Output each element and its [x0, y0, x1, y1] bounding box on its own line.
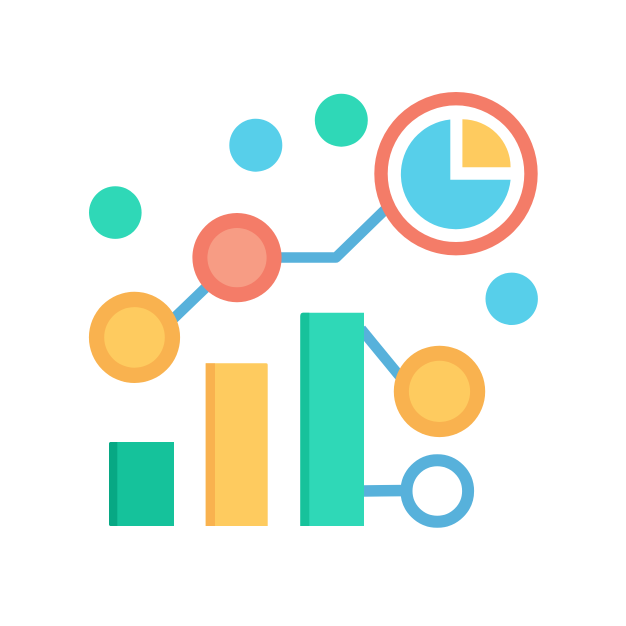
- decorative dot: green upper: [315, 94, 368, 147]
- decorative dot: blue upper: [229, 119, 282, 172]
- node: red: [192, 213, 282, 302]
- decorative dot: green left: [89, 186, 142, 239]
- node: yellow right: [394, 346, 485, 437]
- connector: tall bar to yellow node: [361, 329, 402, 379]
- bar: short green: [109, 442, 174, 526]
- node: yellow left: [89, 292, 180, 383]
- bar: tall green: [300, 313, 364, 526]
- pie large slice: [401, 120, 511, 229]
- bar: medium yellow: [206, 363, 268, 526]
- connector: tall bar to ring node: [362, 485, 410, 497]
- decorative dot: blue right: [486, 273, 538, 325]
- node: blue ring: [406, 460, 468, 522]
- pie small slice: [462, 119, 511, 167]
- line chart connector: [170, 203, 392, 322]
- magnifier ring with pie chart: [381, 99, 531, 249]
- ring: [381, 99, 531, 249]
